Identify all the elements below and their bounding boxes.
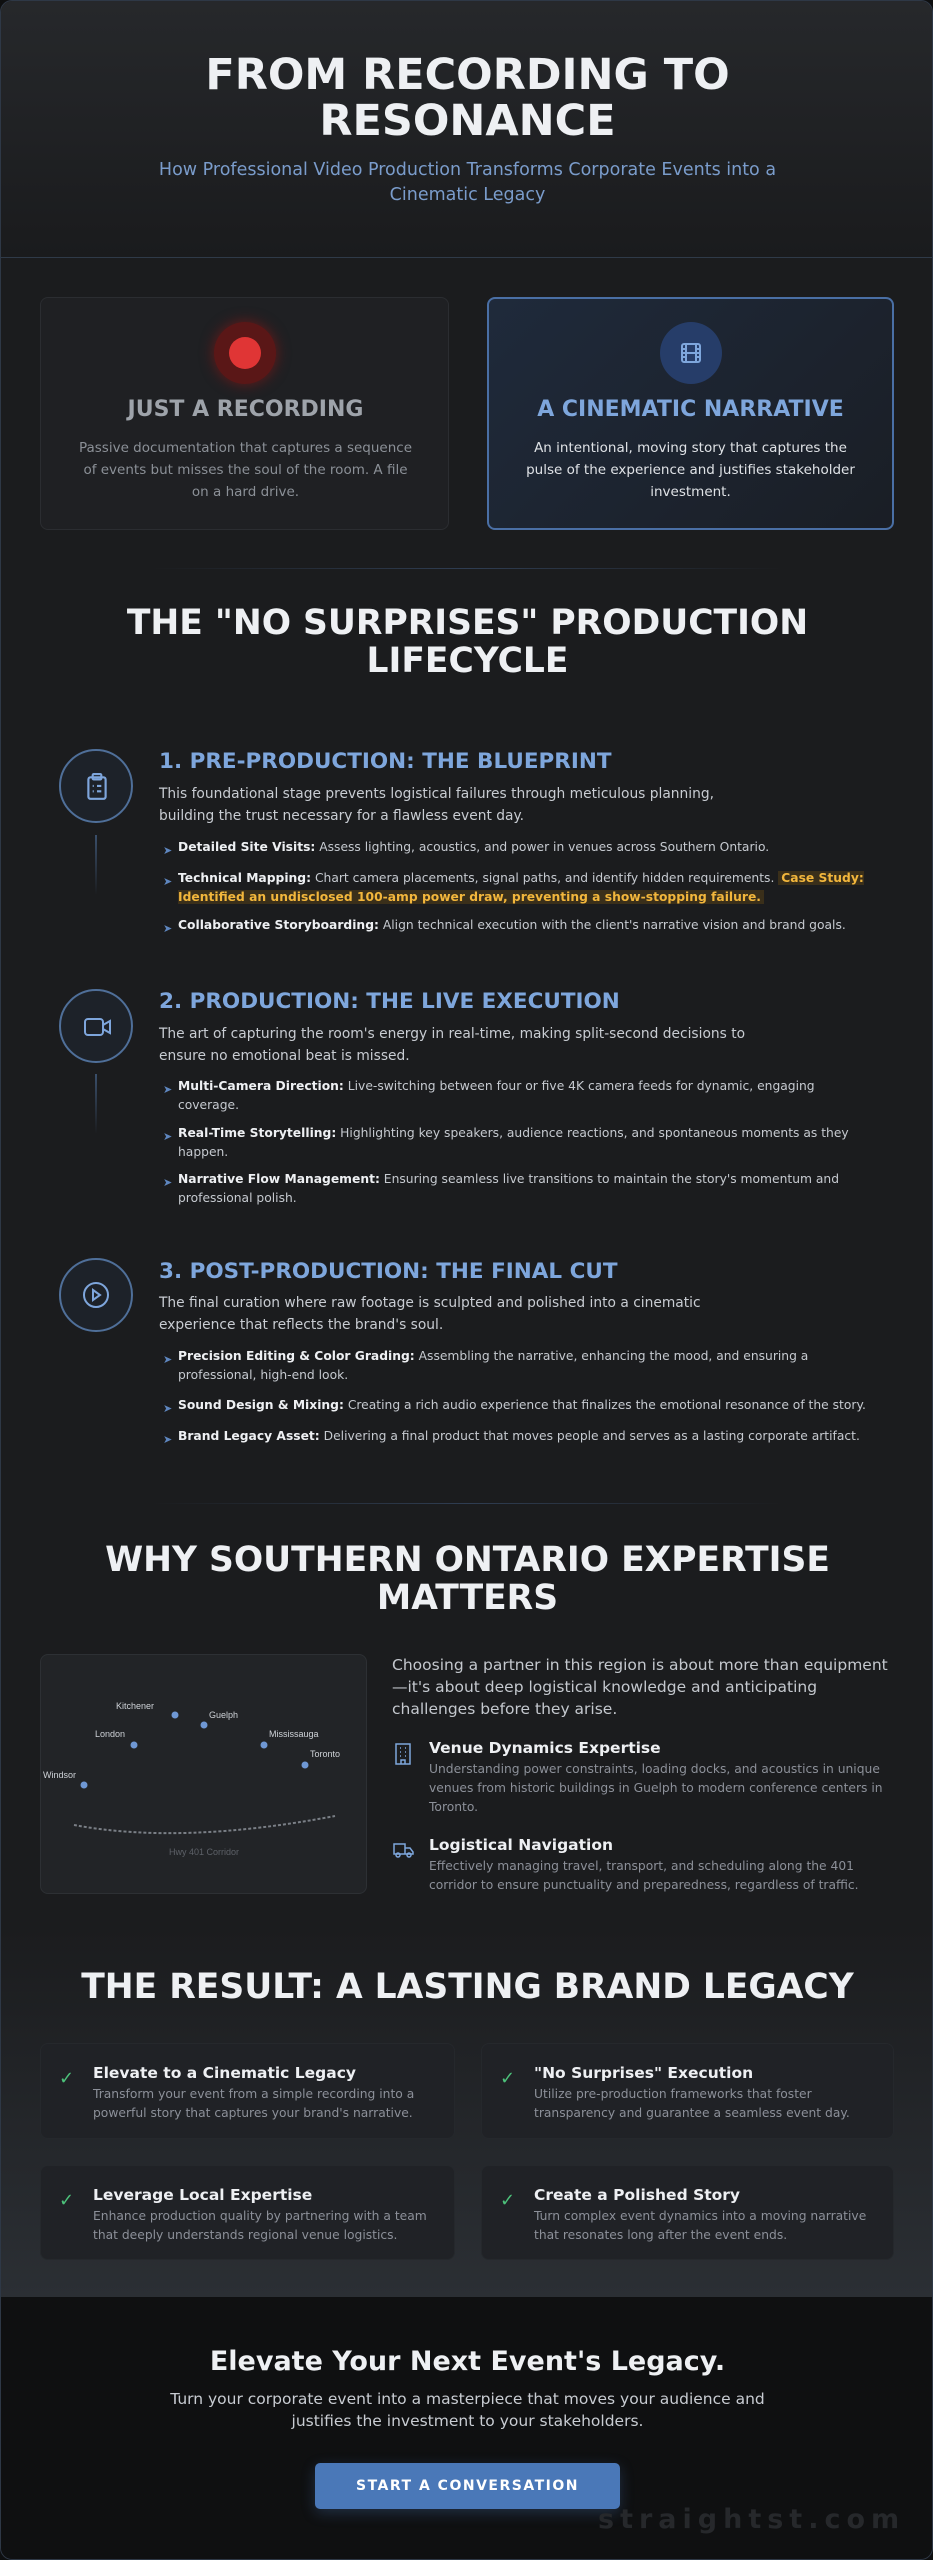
heading: 2. PRODUCTION: THE LIVE EXECUTION — [159, 989, 620, 1014]
phase 3: Brand Legacy Asset: Delivering a final product that moves people and serves as a lasting corporate artifact. — [178, 1429, 860, 1443]
bullets: Detailed Site Visits: Assess lighting, acoustics, and power in venues across Southern Ontario. — [178, 840, 769, 854]
card: cinematic legacy — [40, 2043, 455, 2139]
map panel — [40, 1654, 367, 1894]
subtitle: How Professional Video Production Transforms Corporate Events into a Cinematic Legacy — [159, 160, 776, 205]
icon: record dot — [214, 322, 276, 384]
card: no surprises: ✓ — [500, 2068, 515, 2089]
button — [315, 2463, 620, 2509]
heading: JUST A RECORDING — [128, 397, 363, 422]
icon: clipboard — [59, 749, 133, 823]
section title: southern ontario — [105, 1540, 830, 1618]
card: local expertise: Leverage Local Expertise — [93, 2186, 312, 2204]
text: An intentional, moving story that captures the pulse of the experience and justifies stakeholder investment. — [526, 440, 855, 500]
heading: 3. POST-PRODUCTION: THE FINAL CUT — [159, 1259, 618, 1284]
description: This foundational stage prevents logistical failures through meticulous planning, building the trust necessary for a flawless event day. — [159, 786, 714, 824]
card: no surprises: Utilize pre-production frameworks that foster transparency and guarantee a seamless event day. — [534, 2087, 850, 2120]
phase 2 — [59, 989, 849, 1205]
map: cities — [43, 1701, 340, 1788]
title — [205, 50, 730, 146]
phase 1: Collaborative Storyboarding: Align technical execution with the client's narrative vision and brand goals. — [178, 918, 846, 932]
map: 401 corridor: Hwy 401 Corridor — [169, 1847, 239, 1857]
card: cinematic legacy: ✓ — [59, 2068, 74, 2089]
bullets: coverage. — [178, 1098, 239, 1112]
map: 401 corridor — [74, 1816, 335, 1857]
section title: lifecycle — [127, 603, 808, 681]
map: cities: Guelph — [209, 1710, 238, 1720]
feature: logistical navigation — [393, 1836, 859, 1892]
feature: venue dynamics — [395, 1739, 883, 1814]
CTA heading: Elevate Your Next Event's Legacy. — [210, 2346, 725, 2377]
section title: lifecycle: LIFECYCLE — [367, 641, 568, 681]
card: no surprises: "No Surprises" Execution — [534, 2064, 753, 2082]
card: local expertise — [40, 2165, 455, 2260]
panel: just a recording — [40, 297, 449, 530]
icon: building — [395, 1743, 411, 1765]
heading: 1. PRE-PRODUCTION: THE BLUEPRINT — [159, 749, 612, 774]
title: FROM RECORDING TO — [205, 50, 730, 100]
title: RESONANCE — [319, 96, 616, 146]
result section — [1, 1926, 933, 2297]
map: cities: Windsor — [43, 1770, 76, 1780]
icon: film — [660, 322, 722, 384]
CTA section — [1, 2297, 933, 2560]
section title: southern ontario: WHY SOUTHERN ONTARIO EXPERTISE — [105, 1540, 830, 1580]
bullets — [163, 1077, 885, 1115]
feature: venue dynamics: Understanding power constraints, loading docks, and acoustics in unique venues from historic buildings in Guelph to modern conference centers in Toronto. — [429, 1762, 883, 1814]
phase 1: Technical Mapping: Chart camera placements, signal paths, and identify hidden requirements. Case Study: Identified an undisclosed 100-amp power draw, preventing a show-stopping failure. — [178, 871, 864, 904]
CTA text: Turn your corporate event into a masterpiece that moves your audience and justifies the investment to your stakeholders. — [170, 2390, 765, 2430]
icon: truck — [393, 1843, 414, 1858]
bullets: Multi-Camera Direction: Live-switching between four or five 4K camera feeds for dynamic, engaging — [178, 1079, 815, 1093]
watermark: straightst.com — [598, 2504, 905, 2535]
card: local expertise: Enhance production quality by partnering with a team that deeply understands regional venue logistics. — [93, 2209, 427, 2242]
phase 2: Narrative Flow Management: Ensuring seamless live transitions to maintain the story's momentum and professional polish. — [178, 1172, 839, 1205]
card: cinematic legacy: Elevate to a Cinematic Legacy — [93, 2064, 356, 2082]
card: polished story: Create a Polished Story — [534, 2186, 740, 2204]
card: cinematic legacy: Transform your event from a simple recording into a powerful story that captures your brand's narrative. — [93, 2087, 414, 2120]
intro text: Choosing a partner in this region is about more than equipment—it's about deep logistical knowledge and anticipating challenges before they arise. — [392, 1656, 888, 1718]
phase 2: Real-Time Storytelling: Highlighting key speakers, audience reactions, and spontaneous moments as they happen. — [178, 1126, 849, 1159]
phase 1 — [59, 749, 864, 932]
text: Passive documentation that captures a sequence of events but misses the soul of the room. A file on a hard drive. — [79, 440, 412, 500]
bullets: Precision Editing & Color Grading: Assembling the narrative, enhancing the mood, and ensuring a professional, high-end look. — [178, 1349, 808, 1382]
feature: logistical navigation: Logistical Navigation — [429, 1836, 613, 1854]
heading: A CINEMATIC NARRATIVE — [537, 397, 844, 422]
card: no surprises — [481, 2043, 894, 2139]
description: The final curation where raw footage is sculpted and polished into a cinematic experience that reflects the brand's soul. — [159, 1295, 701, 1333]
feature: venue dynamics: Venue Dynamics Expertise — [429, 1739, 661, 1757]
card: local expertise: ✓ — [59, 2190, 74, 2211]
card: polished story: ✓ — [500, 2190, 515, 2211]
header band — [1, 1, 933, 258]
panel: cinematic narrative — [487, 297, 894, 530]
map: cities: London — [95, 1729, 125, 1739]
map: cities: Kitchener — [116, 1701, 154, 1711]
feature: logistical navigation: Effectively managing travel, transport, and scheduling along the 401 corridor to ensure punctuality and preparedness, regardless of traffic. — [429, 1859, 859, 1892]
section title: southern ontario: MATTERS — [377, 1578, 558, 1618]
phase 3 — [59, 1258, 866, 1443]
icon: play — [59, 1258, 133, 1332]
map: cities: Mississauga — [269, 1729, 319, 1739]
description: The art of capturing the room's energy in real-time, making split-second decisions to ensure no emotional beat is missed. — [159, 1026, 745, 1064]
map: cities: Toronto — [310, 1749, 340, 1759]
icon: video camera — [59, 989, 133, 1063]
section title: lifecycle: THE "NO SURPRISES" PRODUCTION — [127, 603, 808, 643]
section title: result: THE RESULT: A LASTING BRAND LEGACY — [81, 1967, 854, 2007]
button: START A CONVERSATION — [356, 2478, 579, 2494]
card: polished story: Turn complex event dynamics into a moving narrative that resonates long after the event ends. — [534, 2209, 866, 2242]
card: polished story — [481, 2165, 894, 2260]
phase 3: Sound Design & Mixing: Creating a rich audio experience that finalizes the emotional resonance of the story. — [178, 1398, 866, 1412]
